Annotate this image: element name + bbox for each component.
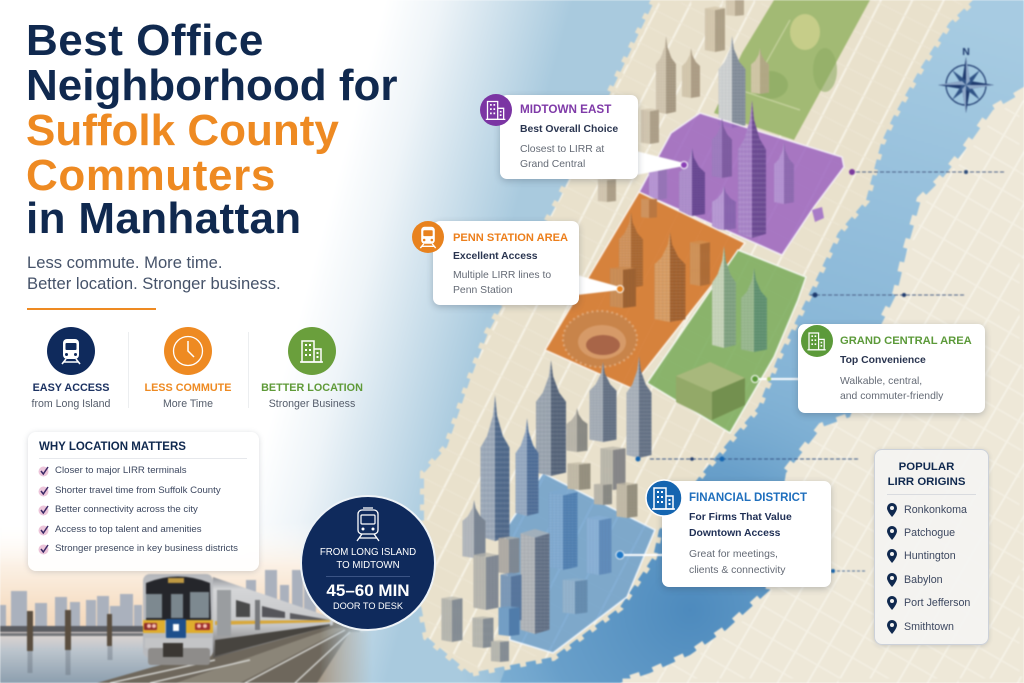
- benefit: easy access: [32, 327, 110, 410]
- photo: skyline and LIRR train: [0, 538, 368, 683]
- leader: Penn Station: [577, 275, 624, 295]
- badge: commute time: TO MIDTOWN: [336, 560, 400, 571]
- card: Penn Station Area: Penn Station: [453, 285, 513, 296]
- subtitle: Less commute. More time.: [27, 253, 222, 272]
- card: Midtown East: MIDTOWN EAST: [520, 103, 611, 116]
- badge: commute time: FROM LONG ISLAND: [320, 547, 416, 558]
- card: Penn Station Area: Excellent Access: [453, 251, 538, 262]
- badge: commute time: [300, 495, 436, 631]
- badge: commute time: DOOR TO DESK: [333, 601, 403, 611]
- card: Midtown East: [500, 95, 638, 179]
- panel: why location matters: Shorter travel time from Suffolk County: [55, 485, 221, 496]
- leader: Grand Central: [752, 376, 801, 382]
- card: Financial District: FINANCIAL DISTRICT: [689, 492, 807, 504]
- distant skyline: [0, 570, 316, 627]
- icon: Midtown East building: [480, 94, 512, 126]
- card: Financial District: [662, 481, 831, 587]
- district: Financial District: [442, 356, 655, 662]
- benefit: easy access: EASY ACCESS: [33, 382, 109, 394]
- district: Grand Central Area: [647, 246, 806, 433]
- train side: [213, 577, 333, 658]
- card: Midtown East: Best Overall Choice: [520, 124, 618, 135]
- train front: [143, 574, 213, 658]
- panel: popular LIRR origins: Port Jefferson: [904, 597, 970, 609]
- panel: popular LIRR origins: Patchogue: [904, 527, 955, 539]
- compass rose: [938, 46, 994, 113]
- card: Grand Central Area: and commuter-friendly: [840, 391, 943, 402]
- card: Financial District: For Firms That Value: [689, 512, 792, 523]
- rail bed and tracks: [97, 622, 360, 683]
- icon: Grand Central building: [801, 325, 833, 357]
- icon: Penn Station train: [412, 221, 444, 253]
- benefit: better location: Stronger Business: [269, 398, 355, 410]
- panel: why location matters: [28, 432, 259, 571]
- subtitle: Better location. Stronger business.: [27, 274, 281, 293]
- icon: Financial District building: [645, 479, 682, 517]
- leader: Midtown East: [636, 151, 688, 175]
- benefit: less commute: More Time: [163, 398, 213, 410]
- benefit: better location: BETTER LOCATION: [261, 382, 363, 394]
- benefit: less commute: [144, 327, 232, 410]
- panel: why location matters: WHY LOCATION MATTERS: [39, 441, 186, 453]
- Manhattan island: [420, 0, 973, 673]
- panel: popular LIRR origins: Ronkonkoma: [904, 504, 967, 516]
- card: Midtown East: Grand Central: [520, 159, 585, 170]
- benefit: less commute: LESS COMMUTE: [144, 382, 231, 394]
- title: [26, 16, 398, 243]
- card: Grand Central Area: GRAND CENTRAL AREA: [840, 335, 972, 347]
- card: Financial District: Downtown Access: [689, 528, 780, 539]
- title: Best Office: [26, 16, 264, 65]
- panel: why location matters: Access to top talent and amenities: [55, 524, 202, 535]
- title: in Manhattan: [26, 194, 302, 243]
- panel: popular LIRR origins: LIRR ORIGINS: [888, 476, 965, 488]
- title: Suffolk County: [26, 106, 339, 155]
- card: Financial District: Great for meetings,: [689, 549, 778, 560]
- panel: why location matters: Better connectivity across the city: [55, 504, 198, 515]
- district: Penn Station Area: [545, 192, 745, 388]
- east shore land: [620, 92, 1024, 683]
- badge: commute time: 45–60 MIN: [326, 581, 410, 600]
- panel: popular LIRR origins: Babylon: [904, 574, 943, 586]
- card: Midtown East: Closest to LIRR at: [520, 144, 604, 155]
- title: Neighborhood for: [26, 61, 398, 110]
- benefit: better location: [261, 327, 363, 410]
- panel: popular LIRR origins: [874, 449, 989, 645]
- icon: Penn Station rotunda: [563, 311, 637, 367]
- panel: popular LIRR origins: POPULAR: [899, 461, 954, 473]
- card: Financial District: clients & connectivity: [689, 565, 785, 576]
- benefit: easy access: from Long Island: [32, 398, 110, 410]
- map connector lines: [636, 169, 1006, 573]
- compass rose: N: [962, 46, 970, 58]
- subtitle: [27, 253, 281, 293]
- leader: Financial District: [616, 551, 664, 559]
- panel: popular LIRR origins: Smithtown: [904, 621, 954, 633]
- card: Grand Central Area: Walkable, central,: [840, 376, 922, 387]
- district: Midtown East: [639, 100, 844, 255]
- panel: why location matters: Closer to major LIRR terminals: [55, 465, 187, 476]
- towers above midtown: [598, 0, 769, 202]
- card: Grand Central Area: [798, 324, 985, 413]
- title: Commuters: [26, 151, 276, 200]
- card: Penn Station Area: PENN STATION AREA: [453, 232, 568, 244]
- card: Penn Station Area: [433, 221, 579, 305]
- panel: why location matters: Stronger presence in key business districts: [55, 543, 238, 554]
- Central Park: [714, 0, 870, 140]
- panel: popular LIRR origins: Huntington: [904, 550, 956, 562]
- card: Penn Station Area: Multiple LIRR lines to: [453, 270, 551, 281]
- card: Grand Central Area: Top Convenience: [840, 355, 926, 366]
